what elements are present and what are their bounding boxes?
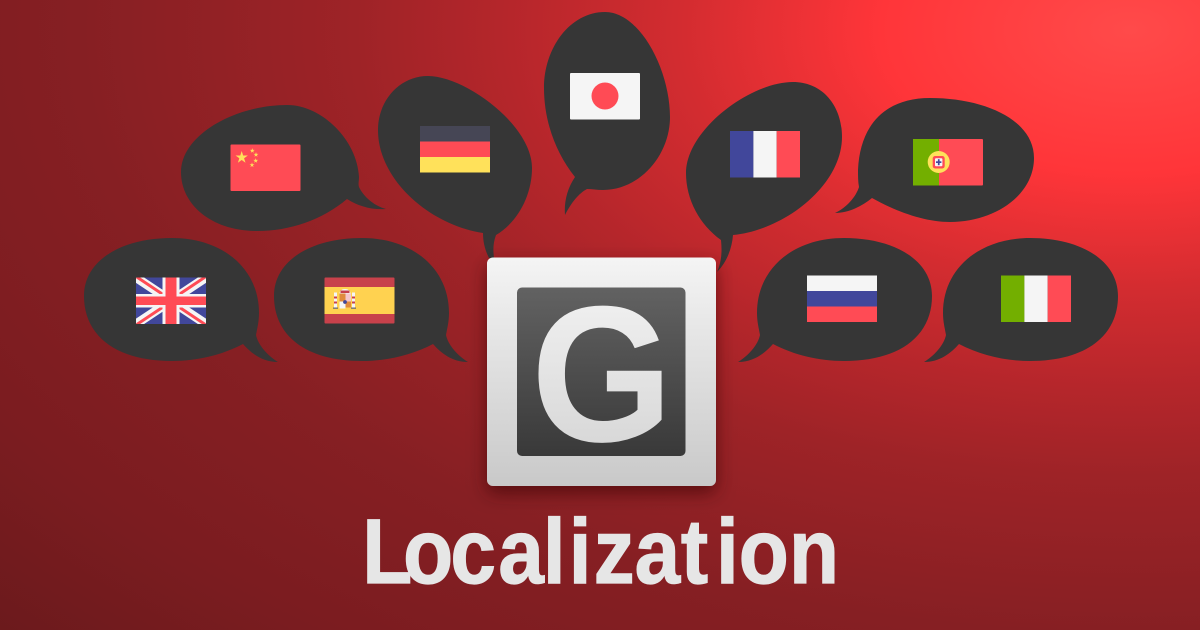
flag: Portugal bbox=[913, 139, 983, 186]
flag: France bbox=[730, 131, 800, 178]
flag: Russia bbox=[807, 276, 877, 322]
flag: Germany bbox=[420, 126, 490, 172]
flag: United Kingdom bbox=[136, 276, 206, 325]
app icon: G logo: G bbox=[531, 266, 673, 482]
app icon: G logo bbox=[487, 258, 716, 486]
speech bubble: Spanish bbox=[274, 238, 468, 362]
speech bubble: Japanese bbox=[544, 12, 670, 215]
speech bubble: German bbox=[378, 76, 532, 258]
flag: Japan bbox=[570, 73, 640, 120]
speech bubble: Russian bbox=[738, 238, 932, 362]
speech bubble: English bbox=[84, 238, 278, 362]
speech bubble: Portuguese bbox=[835, 98, 1034, 222]
speech bubble: French bbox=[686, 82, 842, 272]
title: Localization bbox=[362, 501, 839, 603]
flag: China bbox=[230, 144, 300, 191]
speech bubble: Chinese bbox=[181, 105, 386, 231]
flag: Spain bbox=[324, 278, 394, 324]
coat of arms bbox=[333, 289, 356, 309]
flag: Italy bbox=[1001, 276, 1071, 322]
speech bubble: Italian bbox=[924, 238, 1118, 362]
